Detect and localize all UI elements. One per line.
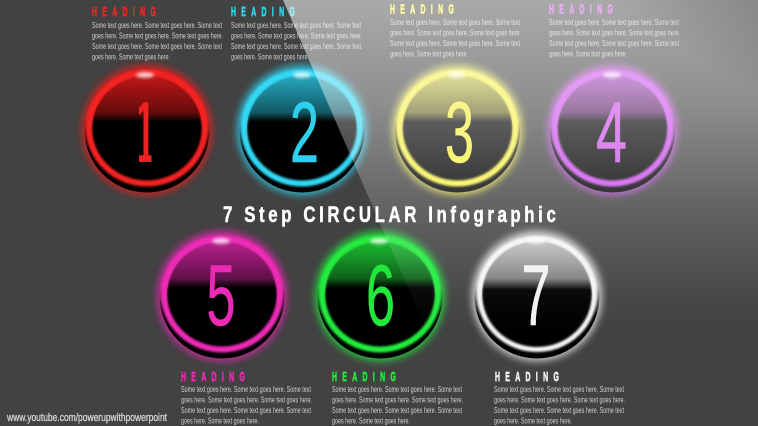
body 6: Some text goes here. Some text goes here. Some text [332, 405, 462, 415]
body 3 [390, 17, 521, 58]
body 1 [92, 20, 223, 62]
body 5 [181, 384, 312, 426]
body 5: Some text goes here. Some text goes here. Some text [181, 405, 311, 415]
body 7: goes here. Some text goes here. Some text goes here. [494, 394, 625, 404]
step 1 circle [82, 65, 212, 195]
step 3 text [390, 4, 521, 58]
body 7: Some text goes here. Some text goes here. Some text [494, 384, 624, 394]
body 1: Some text goes here. Some text goes here. Some text [92, 20, 222, 30]
step 6 text [332, 371, 463, 426]
body 3: Some text goes here. Some text goes here. Some text [390, 17, 520, 27]
body 5: goes here. Some text goes here. Some text goes here. [181, 394, 312, 404]
body 7 [494, 384, 625, 426]
top right corner shade [600, 0, 758, 100]
body 1: Some text goes here. Some text goes here. Some text [92, 41, 222, 51]
body 6: Some text goes here. Some text goes here. Some text [332, 384, 462, 394]
body 2 [231, 20, 362, 62]
step 3 circle [392, 65, 522, 195]
step 1 text [92, 6, 223, 61]
body 3: goes here. Some text goes here. [390, 48, 468, 58]
body 4 [549, 17, 680, 58]
heading 3: HEADING [390, 4, 454, 17]
heading 2: HEADING [231, 6, 295, 20]
number 3: 3 [445, 85, 474, 181]
step 6 circle [315, 231, 445, 361]
step 2 circle [237, 65, 367, 195]
body 4: Some text goes here. Some text goes here. Some text [549, 38, 679, 48]
step 2 text [231, 6, 362, 61]
body 5: Some text goes here. Some text goes here. Some text [181, 384, 311, 394]
step 7 circle [472, 231, 602, 361]
body 4: goes here. Some text goes here. Some text goes here. [549, 28, 680, 38]
body 2: Some text goes here. Some text goes here. Some text [231, 20, 361, 30]
heading 5: HEADING [181, 371, 245, 385]
number 2: 2 [290, 85, 319, 181]
heading 6: HEADING [332, 371, 396, 385]
number 1: 1 [130, 85, 160, 181]
step 7 text [494, 371, 625, 426]
body 3: goes here. Some text goes here. Some text goes here. [390, 28, 521, 38]
glossy light wedge overlay [283, 0, 758, 426]
body 4: goes here. Some text goes here. [549, 48, 627, 58]
step 4 circle [548, 65, 678, 195]
step 5 circle [157, 231, 287, 361]
step 4 text [549, 4, 680, 58]
body 1: goes here. Some text goes here. [92, 52, 170, 62]
body 2: goes here. Some text goes here. [231, 52, 309, 62]
body 2: goes here. Some text goes here. Some text goes here. [231, 30, 362, 40]
body 1: goes here. Some text goes here. Some text goes here. [92, 30, 223, 40]
body 7: Some text goes here. Some text goes here. Some text [494, 405, 624, 415]
heading 7: HEADING [495, 371, 559, 385]
body 5: goes here. Some text goes here. [181, 416, 259, 426]
title: 7 Step CIRCULAR Infographic [223, 203, 556, 228]
heading 4: HEADING [549, 4, 613, 17]
website url: www.youtube.com/powerupwithpowerpoint [6, 412, 167, 424]
number 6: 6 [366, 248, 395, 344]
body 6: goes here. Some text goes here. Some text goes here. [332, 394, 463, 404]
body 4: Some text goes here. Some text goes here. Some text [549, 17, 679, 27]
body 7: goes here. Some text goes here. [494, 416, 572, 426]
number 7: 7 [522, 248, 550, 344]
heading 1: HEADING [92, 6, 156, 20]
body 2: Some text goes here. Some text goes here. Some text [231, 41, 361, 51]
body 3: Some text goes here. Some text goes here. Some text [390, 38, 520, 48]
body 6 [332, 384, 463, 426]
number 5: 5 [206, 248, 236, 344]
number 4: 4 [596, 85, 627, 181]
body 6: goes here. Some text goes here. [332, 416, 410, 426]
step 5 text [181, 371, 312, 426]
